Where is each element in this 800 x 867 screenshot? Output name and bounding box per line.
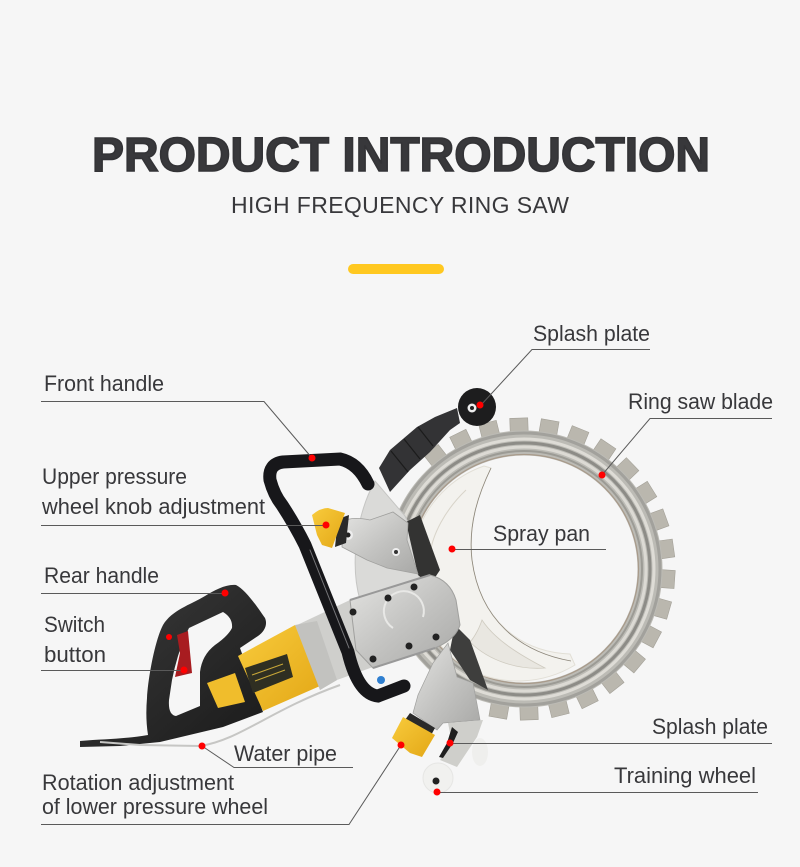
callout: switch button (41, 612, 188, 674)
gearbox neck (295, 600, 373, 690)
callout: rotation adjustment of lower pressure wheel: of lower pressure wheel (42, 794, 268, 819)
callout: water pipe (198, 741, 353, 768)
dark area behind casting (450, 625, 488, 690)
callout: training wheel (434, 763, 758, 796)
dark area behind clamp (406, 515, 440, 585)
callout: spray pan: Spray pan (493, 521, 590, 546)
spray pan (411, 466, 575, 681)
callout: upper pressure wheel knob adjustment: wheel knob adjustment (41, 494, 265, 519)
gearbox housing (350, 575, 460, 668)
blue connector (377, 676, 385, 684)
panel: rating plate (245, 654, 293, 693)
lower neck (405, 713, 435, 737)
callout: upper pressure wheel knob adjustment (41, 464, 330, 528)
lower pressure knob (392, 717, 435, 757)
callout: ring saw blade (598, 389, 773, 478)
training wheel (423, 763, 453, 793)
red trigger (175, 631, 192, 677)
lower casting (413, 643, 480, 730)
blade ring (388, 433, 660, 705)
top roller (458, 388, 496, 426)
water pipe (100, 685, 340, 746)
callout: rear handle (41, 563, 228, 596)
callout: rotation adjustment of lower pressure wheel: Rotation adjustment (42, 770, 234, 795)
callout: ring saw blade: Ring saw blade (628, 389, 773, 414)
motor body (207, 621, 337, 711)
title: PRODUCT INTRODUCTION (92, 129, 710, 182)
callout: splash plate (lower): Splash plate (652, 714, 768, 739)
callout: front handle: Front handle (44, 371, 164, 396)
callout: switch button: Switch (44, 612, 105, 637)
callout: training wheel: Training wheel (614, 763, 756, 788)
base plate (355, 481, 430, 620)
yellow accent bar (348, 264, 444, 274)
front handle tube (270, 459, 404, 696)
callout: splash plate (lower) (446, 714, 772, 746)
ring saw machine illustration (80, 388, 675, 793)
callout: splash plate (top): Splash plate (533, 321, 650, 346)
panel: yellow (207, 673, 245, 708)
callout: splash plate (top) (476, 321, 650, 408)
guard bracket (439, 720, 488, 767)
callout: upper pressure wheel knob adjustment: Upper pressure (42, 464, 187, 489)
rear handle (80, 585, 266, 747)
grip pad (379, 408, 460, 492)
callout: switch button: button (44, 642, 106, 667)
callout: rear handle: Rear handle (44, 563, 159, 588)
upper clamp (342, 512, 418, 574)
subtitle: HIGH FREQUENCY RING SAW (231, 192, 569, 218)
callout: water pipe: Water pipe (234, 741, 337, 766)
callout: front handle (41, 371, 316, 462)
blade segments (424, 418, 675, 720)
callout: spray pan (448, 521, 606, 552)
callout: rotation adjustment of lower pressure wheel (41, 742, 404, 824)
upper pressure knob (312, 508, 349, 548)
